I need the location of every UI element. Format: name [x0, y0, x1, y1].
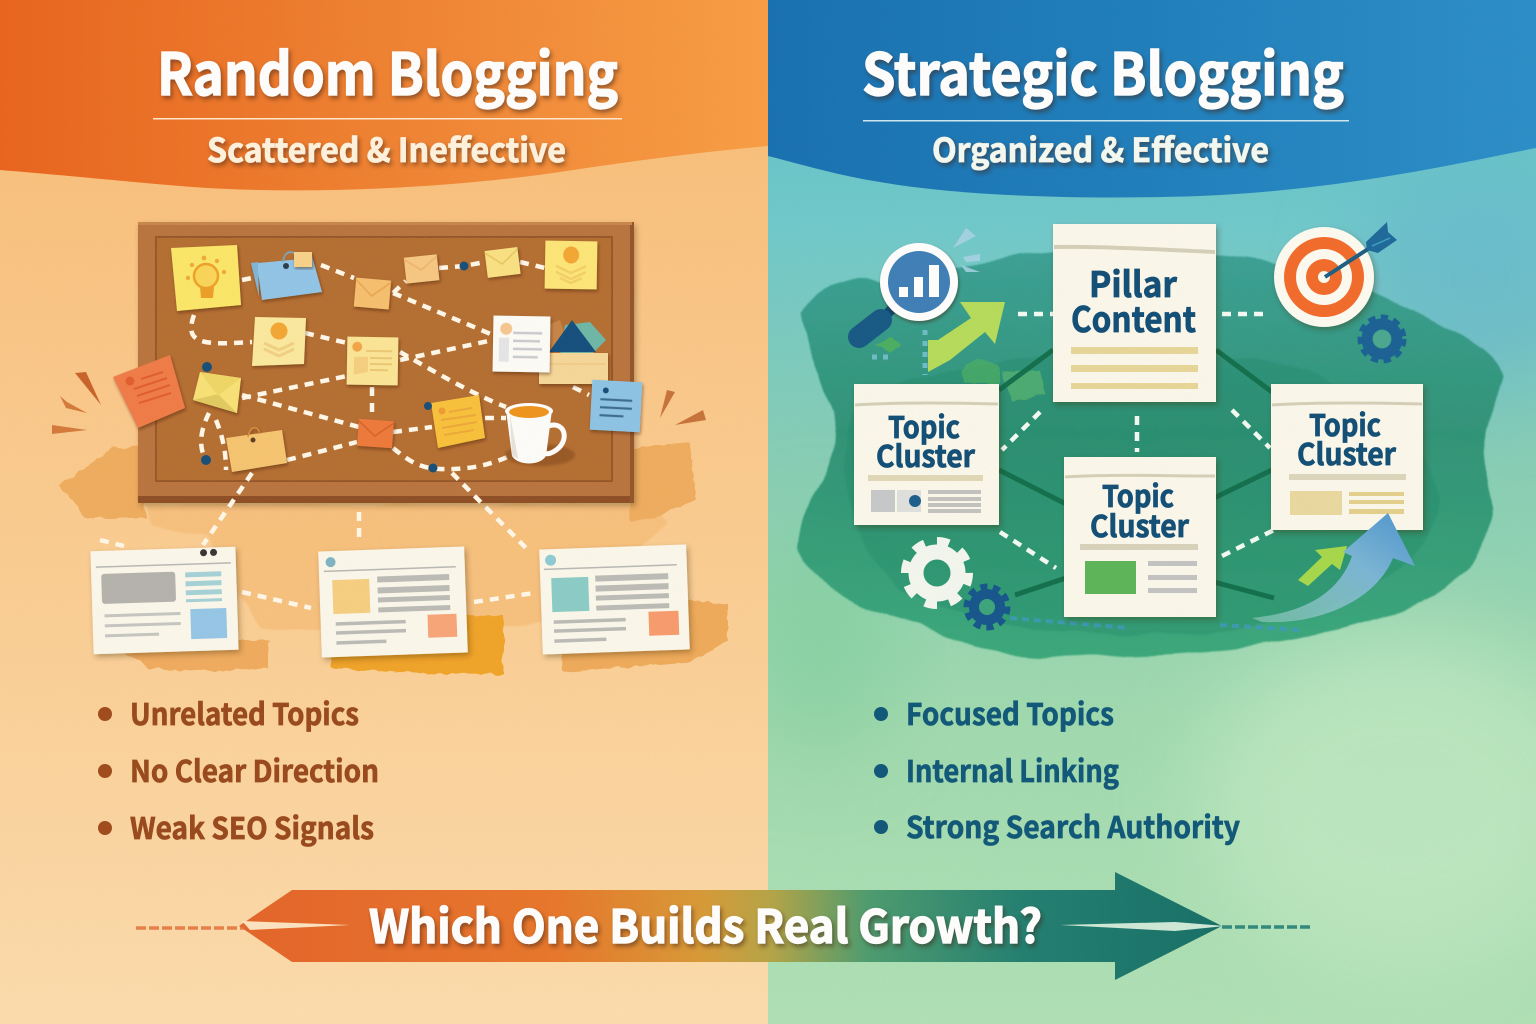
bullet list: strategic blogging: Internal Linking: [906, 747, 1119, 791]
bullet list: random blogging: No Clear Direction: [130, 747, 379, 791]
icon: white gear: [906, 542, 968, 604]
pin: [202, 362, 212, 372]
background washes on the right panel: [750, 170, 1536, 970]
card: Topic Cluster middle: Topic: [1102, 472, 1174, 516]
card: Topic Cluster right: [1271, 384, 1423, 530]
burst marks left: [52, 372, 101, 434]
brush strokes behind board and cards: [60, 442, 728, 675]
subheading: Organized & Effective: Organized & Effective: [932, 124, 1269, 172]
note: pale yellow with sun: [252, 317, 306, 366]
solid link lines: [999, 350, 1274, 598]
panel: right header band: [768, 0, 1536, 197]
icon: target with arrow: [1274, 222, 1397, 327]
card: Pillar Content: Pillar: [1089, 257, 1178, 308]
note: tan envelope top: [404, 254, 439, 284]
note: blue pinned: [251, 256, 322, 300]
web page card 1: [90, 547, 239, 654]
card: Topic Cluster right: Topic: [1309, 401, 1381, 445]
heading rule left: [153, 118, 622, 120]
icon: magnifying glass: [859, 243, 958, 337]
left sliver: [242, 921, 350, 930]
note: blue right: [590, 380, 642, 432]
note: white document: [493, 316, 550, 373]
dashed strings below board: [100, 473, 534, 608]
burst marks right: [660, 390, 706, 425]
note: orange envelope: [357, 419, 394, 448]
pin: [424, 402, 432, 410]
panel: left header band: [0, 0, 768, 190]
note: pale yellow text: [347, 337, 398, 385]
card: Topic Cluster left: Topic: [888, 403, 960, 447]
card: Topic Cluster left: [854, 384, 999, 525]
note: yellow envelope top: [485, 247, 521, 278]
dashed strings: [191, 262, 589, 470]
bullet list: strategic blogging: [874, 690, 1240, 847]
card: Pillar Content: [1053, 224, 1216, 402]
bullet list: random blogging: Unrelated Topics: [130, 690, 359, 734]
card: Topic Cluster right: Cluster: [1297, 430, 1397, 474]
pins: [201, 455, 438, 472]
dotted guides under magnifier: [872, 330, 925, 375]
left trailing dashes: [136, 926, 245, 930]
bullet list: strategic blogging: Strong Search Authority: [906, 803, 1240, 847]
right sliver: [1060, 922, 1225, 931]
green paint blob: [795, 252, 1503, 656]
note: yellow with sun: [545, 241, 597, 289]
note: orange tilted: [113, 355, 185, 428]
bullet list: strategic blogging: Focused Topics: [906, 690, 1114, 734]
dashed link lines: [1000, 314, 1280, 568]
icon: blue curved arrow: [1252, 513, 1415, 622]
card: Topic Cluster middle: Cluster: [1090, 502, 1190, 546]
right trailing dashes: [1222, 925, 1313, 929]
panel: right background: [768, 0, 1536, 1024]
web page card 3: [539, 544, 690, 655]
bottom double arrow: [136, 872, 1313, 980]
cork surface: [156, 237, 612, 481]
subheading: Scattered & Ineffective: Scattered & Ineffective: [207, 124, 566, 172]
corkboard: [113, 222, 642, 503]
card: Topic Cluster middle: [1064, 457, 1216, 617]
icon: blue gear bottom: [967, 587, 1007, 627]
darker inner wash: [846, 352, 1440, 634]
pin and loop on blue note: [283, 252, 296, 269]
folder with swatches: [539, 320, 608, 384]
heading rule right: [863, 120, 1349, 122]
card: Pillar Content: Content: [1071, 292, 1196, 343]
bullet list: random blogging: Weak SEO Signals: [130, 804, 374, 848]
note: yellow lightbulb: [171, 245, 241, 311]
green mottled patches: [875, 337, 1045, 402]
web page card 2: [318, 546, 468, 658]
note: small tan: [294, 252, 312, 267]
pin: [460, 262, 468, 270]
icon: sparkle marks: [953, 228, 980, 272]
note: tan envelope: [354, 278, 391, 310]
heading: Strategic Blogging: Strategic Blogging: [862, 28, 1344, 112]
icon: blue gear top right: [1361, 318, 1403, 360]
bullet list: random blogging: [98, 690, 379, 848]
icon: coffee cup: [505, 403, 575, 466]
closing question: Which One Builds Real Growth?: [369, 891, 1042, 957]
icon: green growth arrow: [928, 302, 1005, 372]
card: Topic Cluster left: Cluster: [876, 432, 976, 476]
blue dotted link: [1010, 618, 1300, 630]
note: tan pinned: [226, 428, 287, 472]
heading: Random Blogging: Random Blogging: [157, 28, 618, 112]
board frame: [138, 222, 634, 503]
panel: left background: [0, 0, 768, 1024]
note: amber: [431, 395, 485, 448]
icon: small green arrow: [1298, 546, 1347, 586]
note: yellow envelope left: [193, 372, 241, 413]
